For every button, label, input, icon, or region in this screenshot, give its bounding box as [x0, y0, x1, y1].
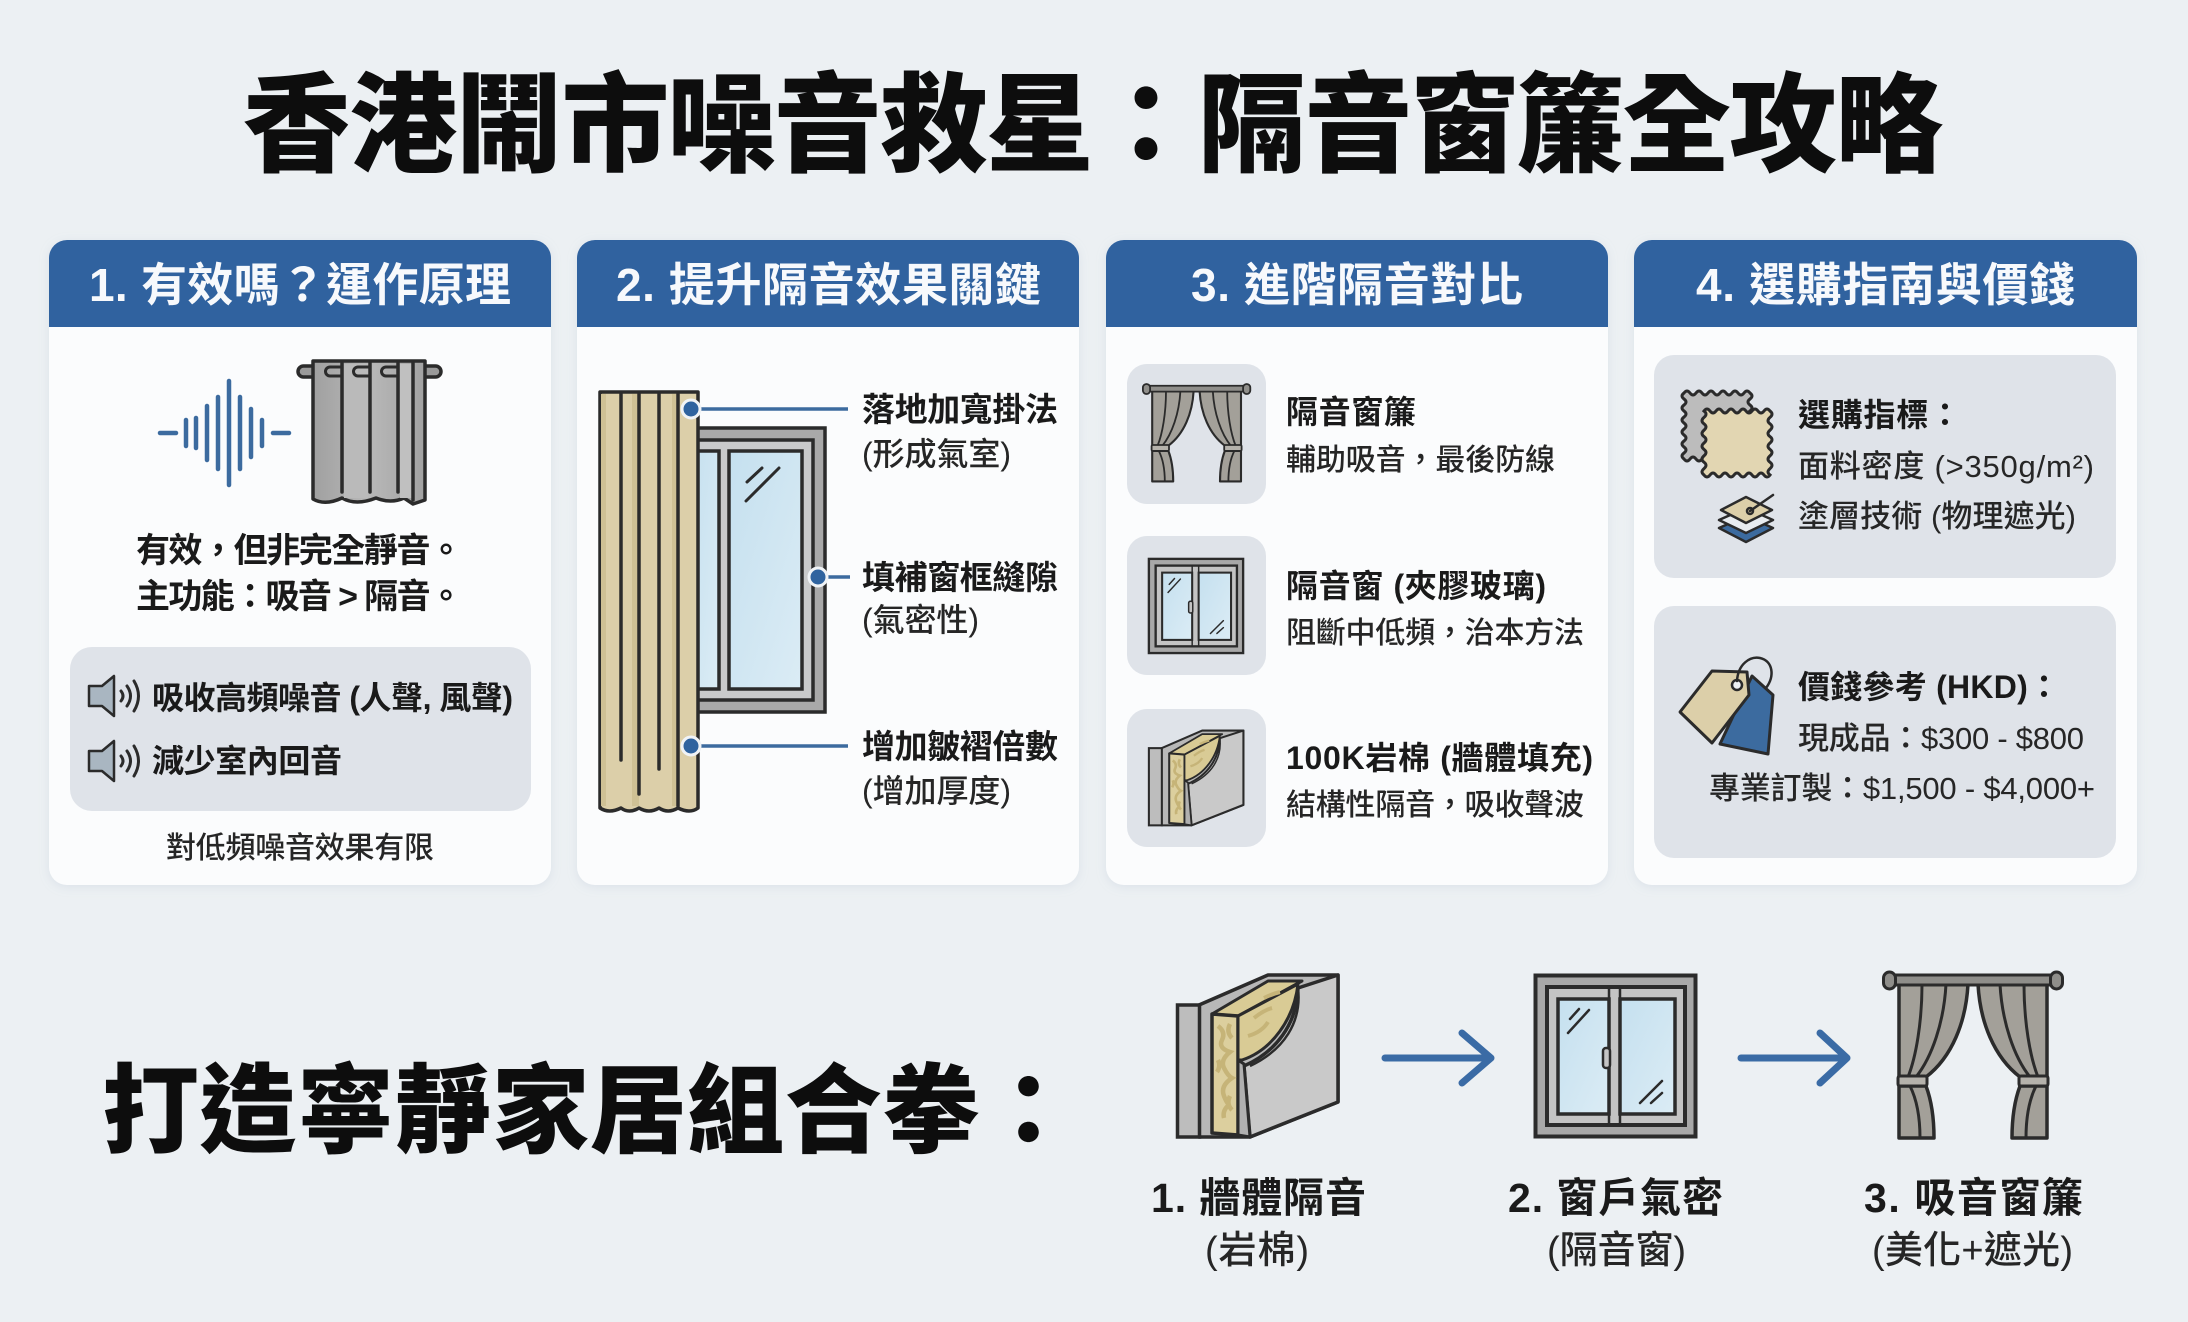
- benefit 1 text: 吸收高頻噪音 (人聲, 風聲): [152, 680, 513, 716]
- price text: [1709, 669, 2095, 806]
- icon: price tags: [1680, 658, 1773, 754]
- row: rock wool: [1127, 709, 1593, 847]
- row: window: [1127, 536, 1584, 675]
- panel 4 header: 4. 選購指南與價錢: [1696, 259, 2075, 311]
- curtain text: [1286, 394, 1555, 477]
- step 3: curtain: [1864, 972, 2083, 1272]
- criteria text: [1798, 397, 2094, 534]
- callout: seal gaps: 填補窗框縫隙: [862, 559, 1058, 596]
- combo heading: 打造寧靜家居組合拳：: [102, 1057, 1077, 1166]
- text: effective statement: 主功能：吸音 > 隔音。: [136, 578, 463, 616]
- benefits box: [70, 647, 531, 811]
- icon: drapes: [1884, 972, 2062, 1138]
- panel: 1 how it works: [49, 240, 551, 885]
- curtain text: 輔助吸音，最後防線: [1286, 444, 1555, 477]
- rock wool text: [1286, 740, 1593, 822]
- curtain illustration: [600, 392, 698, 811]
- curtain text: 隔音窗簾: [1286, 394, 1416, 430]
- step 3 label: (美化+遮光): [1872, 1230, 2073, 1272]
- step 3 label: 3. 吸音窗簾: [1864, 1175, 2083, 1221]
- icon: sound wave: [160, 381, 289, 485]
- panel: 4 buying guide: [1634, 240, 2137, 885]
- window text: 阻斷中低頻，治本方法: [1286, 617, 1584, 650]
- rock wool text: 結構性隔音，吸收聲波: [1286, 789, 1584, 822]
- step 2 label: 2. 窗戶氣密: [1508, 1175, 1723, 1221]
- rock wool text: 100K岩棉 (牆體填充): [1286, 740, 1593, 776]
- arrow 1: [1385, 1033, 1491, 1083]
- price text: 價錢參考 (HKD)：: [1798, 669, 2060, 705]
- step 2 label: (隔音窗): [1547, 1230, 1686, 1272]
- callout: floor length: 落地加寬掛法: [862, 391, 1058, 428]
- panel 1 header: [49, 240, 551, 327]
- callout: seal gaps: (氣密性): [862, 602, 979, 638]
- step 3 label: [1864, 1175, 2083, 1272]
- criteria text: 選購指標：: [1798, 397, 1961, 433]
- panel 3 header: [1106, 240, 1608, 327]
- step 2 label: [1508, 1175, 1723, 1272]
- icon: fabric swatches: [1682, 391, 1772, 477]
- price text: 現成品：$300 - $800: [1798, 721, 2084, 756]
- text: effective statement: [136, 532, 463, 616]
- callout markers and leader lines: [682, 400, 850, 755]
- step 1 label: (岩棉): [1205, 1230, 1309, 1272]
- arrow 2: [1741, 1033, 1847, 1083]
- panel 4 header: [1634, 240, 2137, 327]
- criteria text: 面料密度 (>350g/m²): [1798, 449, 2094, 484]
- panel 3 header: 3. 進階隔音對比: [1191, 259, 1523, 311]
- text: effective statement: 有效，但非完全靜音。: [136, 532, 463, 570]
- callout: floor length: [862, 391, 1058, 472]
- row: curtain: [1127, 364, 1555, 504]
- callout: pleats: [862, 728, 1058, 809]
- title: 香港鬧市噪音救星：隔音窗簾全攻略: [243, 65, 1943, 186]
- benefit 2 text: 減少室內回音: [152, 743, 342, 779]
- panel 1 header: 1. 有效嗎？運作原理: [89, 259, 511, 311]
- panel 2 header: [577, 240, 1079, 327]
- callout: pleats: (增加厚度): [862, 773, 1011, 809]
- panel 2 header: 2. 提升隔音效果關鍵: [616, 259, 1041, 311]
- criteria text: 塗層技術 (物理遮光): [1798, 499, 2076, 534]
- step 2: window: [1508, 976, 1723, 1272]
- callout: pleats: 增加皺褶倍數: [862, 728, 1058, 765]
- footnote: 對低頻噪音效果有限: [166, 832, 434, 865]
- window text: [1286, 568, 1584, 650]
- callout: seal gaps: [862, 559, 1058, 638]
- icon: grey curtain: [298, 361, 441, 504]
- step 1: wall: [1151, 975, 1366, 1272]
- box: buying criteria: [1654, 355, 2116, 578]
- panel: 2 key improvements: [577, 240, 1079, 885]
- panel: 3 comparison: [1106, 240, 1608, 885]
- callout: floor length: (形成氣室): [862, 436, 1011, 472]
- step 1 label: 1. 牆體隔音: [1151, 1175, 1366, 1221]
- icon: coating layers: [1719, 495, 1773, 542]
- icon: speaker 1: [89, 676, 138, 716]
- price text: 專業訂製：$1,500 - $4,000+: [1709, 771, 2095, 806]
- icon: wall section: [1178, 975, 1338, 1137]
- icon: speaker 2: [89, 741, 138, 781]
- box: price reference: [1654, 606, 2116, 858]
- window illustration: [690, 428, 825, 712]
- window text: 隔音窗 (夾膠玻璃): [1286, 568, 1546, 604]
- icon: window: [1536, 976, 1696, 1136]
- step 1 label: [1151, 1175, 1366, 1272]
